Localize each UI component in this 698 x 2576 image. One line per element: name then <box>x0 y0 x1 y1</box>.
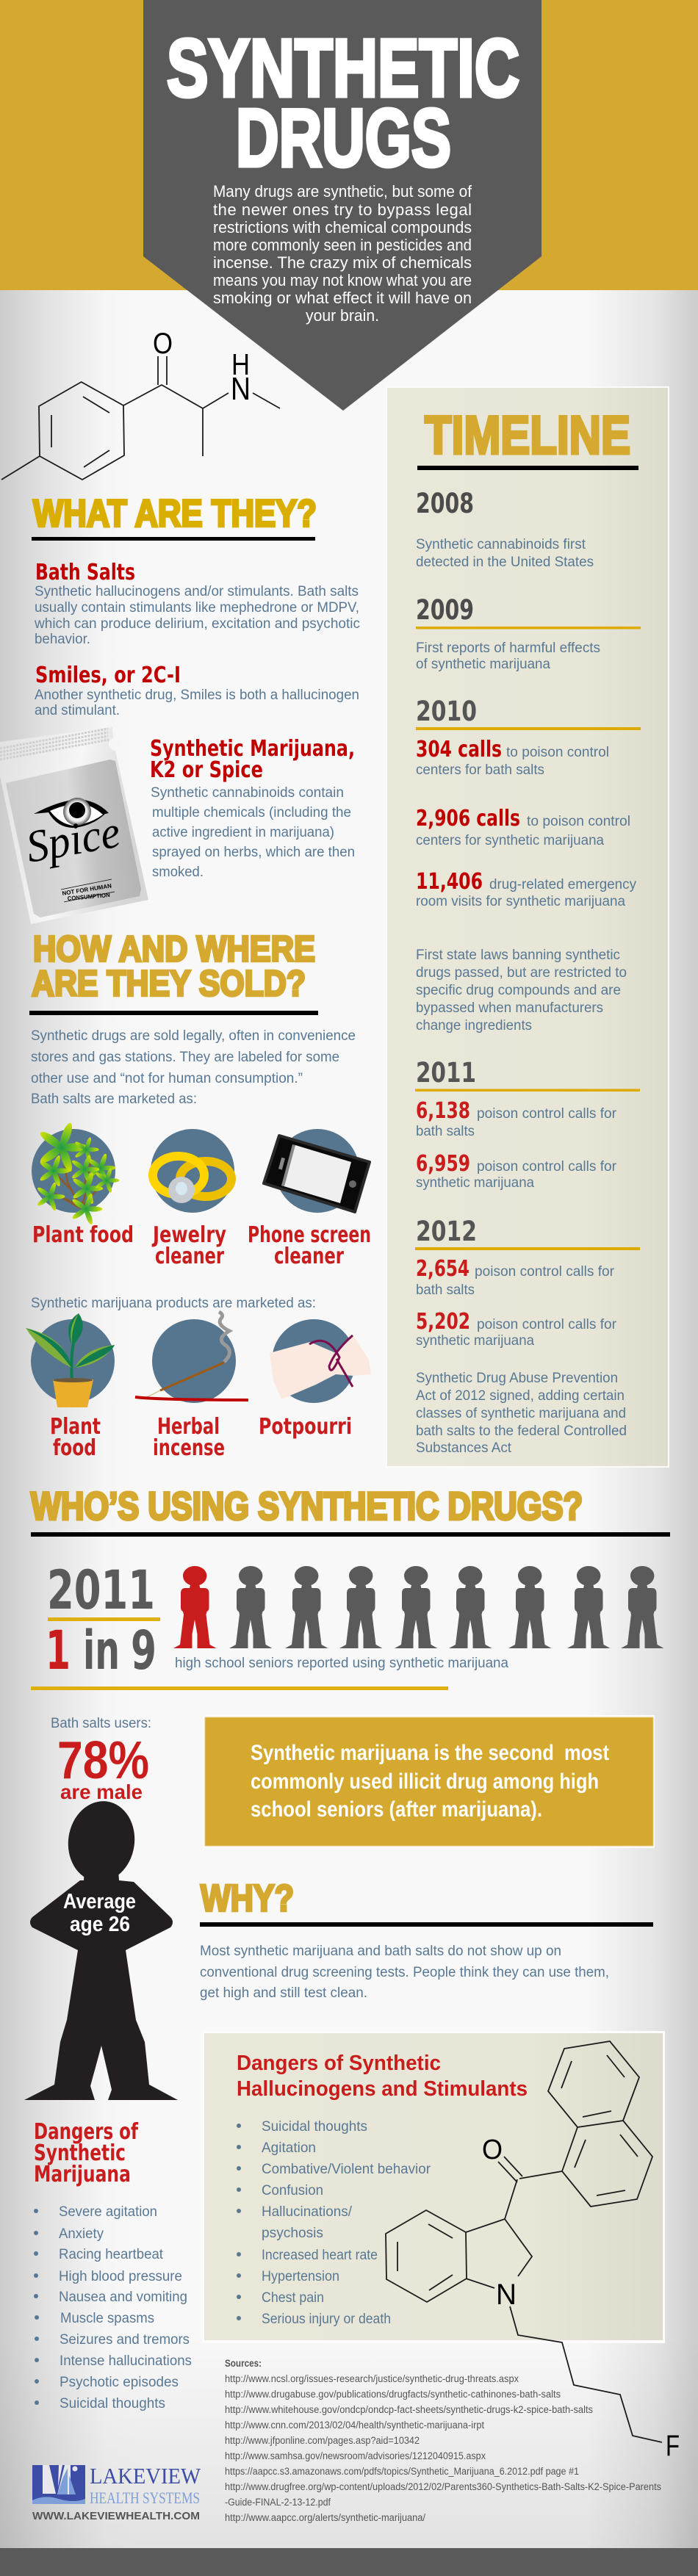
2012: 5,202 <box>416 1309 470 1335</box>
intro <box>31 1028 356 1107</box>
section: why: WHY? <box>201 1877 294 1919</box>
intro text: smoking or what effect it will have on <box>213 289 472 307</box>
list: Serious injury or death <box>262 2312 391 2327</box>
list: Muscle spasms <box>60 2311 154 2326</box>
intro text: incense. The crazy mix of chemicals <box>213 253 472 272</box>
sources: http://www.ncsl.org/issues-research/justice/synthetic-drug-threats.aspx <box>225 2373 519 2384</box>
synthetic marijuana: sprayed on herbs, which are then <box>152 845 355 860</box>
footer bar <box>0 2548 698 2576</box>
2011: 2011 <box>416 1057 476 1089</box>
bath salts <box>34 560 360 647</box>
molecule: mephedrone <box>1 328 280 480</box>
2012: classes of synthetic marijuana and <box>416 1406 626 1421</box>
2008: Synthetic cannabinoids first <box>416 537 586 552</box>
list: Nausea and vomiting <box>59 2290 187 2305</box>
silhouette: average user: age 26 <box>70 1913 130 1936</box>
2012: Substances Act <box>416 1440 512 1456</box>
sources: Sources: <box>225 2358 262 2369</box>
sources: http://www.drugabuse.gov/publications/drugfacts/synthetic-cathinones-bath-salts <box>225 2389 561 2400</box>
stat: 2011 1 in 9: 1 <box>46 1620 71 1682</box>
2012: poison control calls for <box>477 1317 617 1332</box>
header banner <box>143 0 542 411</box>
heading: Synthetic <box>34 2140 126 2166</box>
2009: First reports of harmful effects <box>416 641 600 656</box>
labels: bath salts marketed as: Phone screen <box>248 1222 371 1248</box>
sources: http://www.aapcc.org/alerts/synthetic-marijuana/ <box>225 2512 425 2523</box>
icon: potpourri <box>270 1319 371 1403</box>
callout: second most used <box>203 1715 655 1848</box>
2011: 6,138 <box>416 1098 470 1124</box>
2010: First state laws banning synthetic <box>416 948 620 963</box>
title <box>167 23 519 184</box>
intro text <box>213 182 472 325</box>
2008: 2008 <box>416 488 474 519</box>
section: why: conventional drug screening tests. People think they can use them, <box>200 1965 609 1980</box>
logo: lakeview health systems: LAKEVIEW <box>90 2463 201 2489</box>
sources: http://www.whitehouse.gov/ondcp/ondcp-fact-sheets/synthetic-drugs-k2-spice-bath-salts <box>225 2404 593 2415</box>
people pictogram: 1 in 9 <box>173 1566 664 1648</box>
2012: bath salts <box>416 1282 475 1298</box>
2010: bypassed when manufacturers <box>416 1000 603 1016</box>
molecule: synthetic cannabinoid: O <box>482 2135 503 2165</box>
section: why: Most synthetic marijuana and bath salts do not show up on <box>200 1944 561 1959</box>
labels: marijuana marketed as: Potpourri <box>259 1414 352 1440</box>
sources: https://aapcc.s3.amazonaws.com/pdfs/topics/Synthetic_Marijuana_6.2012.pdf page #1 <box>225 2466 579 2477</box>
synthetic marijuana: Synthetic cannabinoids contain <box>151 785 344 801</box>
list: Confusion <box>262 2183 323 2198</box>
title: SYNTHETIC <box>167 23 519 114</box>
icon: phone <box>264 1129 370 1213</box>
icon: spice packet: Spice <box>23 807 123 873</box>
synthetic marijuana: active ingredient in marijuana) <box>152 825 334 840</box>
2012: 2,654 <box>416 1256 469 1282</box>
labels: bath salts marketed as: cleaner <box>274 1244 344 1269</box>
logo: lakeview health systems: WWW.LAKEVIEWHEALTH.COM <box>32 2510 200 2522</box>
2012: 2012 <box>416 1216 477 1247</box>
heading: TIMELINE <box>425 405 630 466</box>
list: Seizures and tremors <box>60 2332 190 2348</box>
smiles <box>35 663 359 718</box>
section: what are they <box>0 492 360 924</box>
section: who's using <box>31 1485 670 1690</box>
2011 <box>415 1057 640 1191</box>
labels: marijuana marketed as: Herbal <box>157 1414 220 1440</box>
2011: bath salts <box>416 1124 475 1139</box>
intro: Bath salts are marketed as: <box>31 1092 197 1107</box>
2010: centers for bath salts <box>416 762 544 778</box>
intro text: means you may not know what you are <box>213 271 472 289</box>
logo mark <box>32 2465 85 2504</box>
list: Racing heartbeat <box>59 2247 164 2262</box>
synthetic marijuana: multiple chemicals (including the <box>152 805 351 820</box>
icon: potted plant <box>26 1313 115 1407</box>
heading <box>237 2052 528 2101</box>
2010: specific drug compounds and are <box>416 983 621 998</box>
title: DRUGS <box>236 93 451 184</box>
2012: bath salts to the federal Controlled <box>416 1424 627 1439</box>
icon: incense <box>135 1312 248 1403</box>
list: Increased heart rate <box>262 2248 378 2263</box>
molecule: synthetic cannabinoid: F <box>666 2430 680 2462</box>
intro text: the newer ones try to bypass legal <box>213 201 472 219</box>
2010: 2,906 calls <box>416 806 520 831</box>
heading: WHAT ARE THEY? <box>33 492 317 535</box>
sources: http://www.jfponline.com/pages.asp?aid=10342 <box>225 2435 420 2446</box>
synthetic marijuana: smoked. <box>152 865 204 880</box>
molecule: mephedrone: H <box>231 347 250 381</box>
list: Intense hallucinations <box>60 2353 192 2369</box>
2012: poison control calls for <box>475 1264 615 1280</box>
2011: poison control calls for <box>477 1159 617 1175</box>
2009: 2009 <box>416 594 474 626</box>
2009 <box>416 594 641 672</box>
bath salts: Synthetic hallucinogens and/or stimulants. Bath salts <box>35 584 359 599</box>
labels: bath salts marketed as: Jewelry <box>151 1222 226 1248</box>
sources: -Guide-FINAL-2-13-12.pdf <box>225 2497 331 2508</box>
intro text: more commonly seen in pesticides and <box>213 236 472 254</box>
icon: jewelry <box>151 1129 234 1213</box>
silhouette: average user <box>24 1797 178 2100</box>
stat: 2011 1 in 9: 2011 <box>47 1559 155 1622</box>
header gold band <box>0 0 698 290</box>
2010 <box>416 696 641 1033</box>
stat: 2011 1 in 9: in <box>83 1620 120 1682</box>
2012: Synthetic Drug Abuse Prevention <box>416 1371 618 1386</box>
sources: http://www.samhsa.gov/newsroom/advisories/1212040915.aspx <box>225 2450 486 2461</box>
smiles: Another synthetic drug, Smiles is both a hallucinogen <box>35 688 359 703</box>
heading: WHO’S USING SYNTHETIC DRUGS? <box>31 1485 583 1528</box>
list <box>237 2119 431 2327</box>
icon: spice packet <box>0 727 148 924</box>
2012 <box>415 1216 640 1456</box>
molecule: mephedrone: N <box>231 371 251 407</box>
2010: 11,406 <box>416 869 483 895</box>
heading <box>34 2119 139 2187</box>
synthetic marijuana: Synthetic Marijuana, <box>150 736 355 762</box>
list <box>34 2204 192 2411</box>
stat: bath salts users: Bath salts users: <box>51 1716 151 1731</box>
labels: bath salts marketed as: cleaner <box>155 1244 224 1269</box>
list: Agitation <box>262 2140 316 2156</box>
heading: Dangers of Synthetic <box>237 2052 441 2075</box>
synthetic marijuana <box>150 736 355 880</box>
smiles: Smiles, or 2C-I <box>35 663 181 688</box>
list: Hallucinations/ <box>262 2204 353 2220</box>
stat: 2011 1 in 9: 9 <box>131 1620 156 1682</box>
icon: spice packet: NOT FOR HUMAN <box>62 882 112 897</box>
heading <box>32 930 315 1003</box>
silhouette: average user: Average <box>63 1890 136 1913</box>
heading: Dangers of <box>34 2119 139 2145</box>
intro: other use and “not for human consumption.” <box>31 1071 303 1086</box>
section: how and where <box>26 930 371 1461</box>
heading: HOW AND WHERE <box>33 930 315 970</box>
panel: timeline <box>386 386 669 1468</box>
sources <box>225 2358 661 2523</box>
2008: detected in the United States <box>416 555 594 570</box>
heading: ARE THEY SOLD? <box>32 964 306 1003</box>
callout: second most used: commonly used illicit drug among high <box>251 1769 599 1794</box>
molecule: mephedrone: O <box>153 328 173 360</box>
list: psychosis <box>262 2226 323 2241</box>
synthetic marijuana: K2 or Spice <box>150 757 263 783</box>
bath salts: Bath Salts <box>35 560 135 585</box>
list: Severe agitation <box>59 2204 157 2220</box>
smiles: and stimulant. <box>35 703 120 718</box>
molecule: synthetic cannabinoid: N <box>496 2279 517 2311</box>
list: Combative/Violent behavior <box>262 2162 431 2177</box>
intro text: your brain. <box>306 306 379 325</box>
callout: second most used: Synthetic marijuana is the second most <box>251 1741 609 1765</box>
labels: bath salts marketed as: Plant food <box>32 1222 134 1248</box>
molecule: synthetic cannabinoid <box>386 2041 680 2462</box>
2011: 6,959 <box>416 1151 470 1177</box>
labels: marijuana marketed as: Plant <box>50 1414 101 1440</box>
2012: synthetic marijuana <box>416 1333 534 1349</box>
dangers of synthetic marijuana <box>34 2119 192 2411</box>
2011: poison control calls for <box>477 1106 617 1122</box>
2010: 304 calls <box>416 737 502 762</box>
heading: Marijuana <box>34 2162 131 2187</box>
2010: centers for synthetic marijuana <box>416 833 604 848</box>
section: why: get high and still test clean. <box>200 1985 367 2001</box>
icon: spice packet: CONSUMPTION <box>67 892 110 902</box>
stat: bath salts users: 78% <box>57 1731 149 1790</box>
2010: to poison control <box>527 814 630 829</box>
bath salts: which can produce delirium, excitation and psychotic <box>34 616 360 632</box>
text: marijuana products: Synthetic marijuana products are marketed as: <box>31 1296 316 1311</box>
labels: marijuana marketed as: incense <box>153 1435 225 1461</box>
2010: 2010 <box>416 696 477 727</box>
list: High blood pressure <box>59 2269 182 2284</box>
sources: http://www.drugfree.org/wp-content/uploads/2012/02/Parents360-Synthetics-Bath-Salts-K2-Spice-Parents <box>225 2481 661 2492</box>
intro text: restrictions with chemical compounds <box>213 218 472 237</box>
bath salts: usually contain stimulants like mephedrone or MDPV, <box>35 600 359 616</box>
labels: marijuana marketed as <box>50 1414 352 1461</box>
stat: bath salts users: are male <box>60 1781 143 1803</box>
2008 <box>416 488 594 570</box>
list: Suicidal thoughts <box>60 2396 165 2411</box>
logo: lakeview health systems <box>32 2463 201 2522</box>
list: Psychotic episodes <box>60 2375 179 2390</box>
list: Suicidal thoughts <box>262 2119 367 2135</box>
stat: 2011 1 in 9 <box>46 1559 160 1682</box>
2010: drug-related emergency <box>489 877 636 892</box>
list: Chest pain <box>262 2290 324 2306</box>
panel: dangers of hallucinogens and stimulants <box>202 2031 665 2343</box>
icon: plant food <box>32 1122 120 1225</box>
2012: Act of 2012 signed, adding certain <box>416 1388 625 1404</box>
heading: Hallucinogens and Stimulants <box>237 2077 528 2101</box>
2010: drugs passed, but are restricted to <box>416 965 627 981</box>
intro: Synthetic drugs are sold legally, often in convenience <box>31 1028 356 1044</box>
2011: synthetic marijuana <box>416 1175 534 1191</box>
labels: marijuana marketed as: food <box>53 1435 96 1461</box>
intro: stores and gas stations. They are labeled for some <box>31 1050 339 1065</box>
callout: second most used: school seniors (after marijuana). <box>251 1797 542 1822</box>
list: Hypertension <box>262 2269 339 2284</box>
2010: change ingredients <box>416 1018 532 1033</box>
sources: http://www.cnn.com/2013/02/04/health/synthetic-marijuana-irpt <box>225 2420 484 2431</box>
stat: bath salts users <box>51 1716 151 1803</box>
2010: room visits for synthetic marijuana <box>416 894 625 909</box>
logo: lakeview health systems: HEALTH SYSTEMS <box>90 2489 200 2507</box>
list: Anxiety <box>59 2226 104 2242</box>
2010: to poison control <box>506 745 609 760</box>
2009: of synthetic marijuana <box>416 657 550 672</box>
labels: bath salts marketed as <box>32 1222 371 1269</box>
intro text: Many drugs are synthetic, but some of <box>213 182 472 201</box>
section: why <box>200 1877 653 2001</box>
bath salts: behavior. <box>35 632 90 647</box>
caption: high school seniors reported using synthetic marijuana <box>175 1656 508 1671</box>
